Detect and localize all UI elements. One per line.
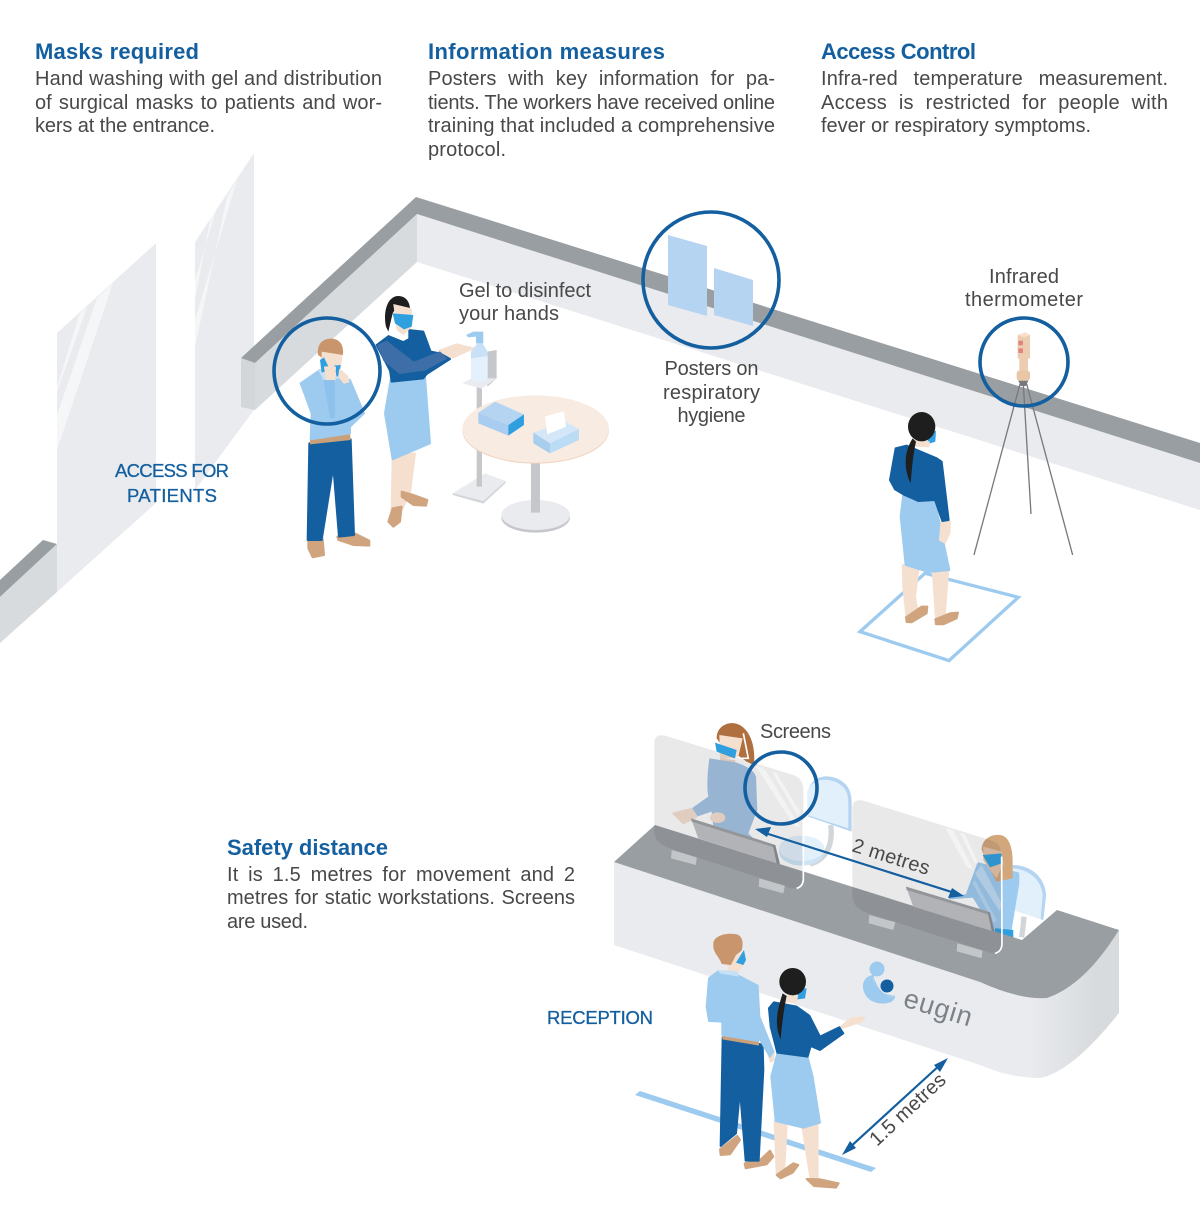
text block: information measures: Posters with key information for pa- xyxy=(428,68,775,90)
posters xyxy=(668,235,753,326)
label: access for patients: PATIENTS xyxy=(127,485,217,506)
text block: masks required: of surgical masks to patients and wor- xyxy=(35,92,382,114)
magnifier circle: thermometer xyxy=(980,318,1068,406)
text block: masks required: Hand washing with gel and distribution xyxy=(35,68,382,90)
chair left xyxy=(779,776,852,866)
text block: safety distance: are used. xyxy=(227,911,308,933)
thermometer on tripod xyxy=(974,332,1073,555)
text block: safety distance xyxy=(227,864,575,933)
text block: information measures: tients. The workers have received online xyxy=(428,92,775,114)
floor marking square xyxy=(860,573,1018,661)
text block: access control xyxy=(821,68,1168,137)
text block: masks required: kers at the entrance. xyxy=(35,115,215,137)
round table with boxes xyxy=(462,395,609,533)
label: posters on respiratory hygiene xyxy=(663,358,760,427)
logo: eugin xyxy=(864,962,976,1032)
heading: safety distance: Safety distance xyxy=(227,835,388,860)
heading: access control: Access Control xyxy=(821,39,976,64)
text block: information measures: protocol. xyxy=(428,139,506,161)
label: infrared thermometer: Infrared xyxy=(989,266,1059,288)
label: 2 metres: 2 metres xyxy=(849,835,932,880)
text block: access control: fever or respiratory symptoms. xyxy=(821,115,1091,137)
text block: information measures xyxy=(428,68,775,161)
woman in queue xyxy=(769,968,864,1188)
entrance glass door right xyxy=(195,153,254,490)
magnifier circle: mask xyxy=(274,318,380,424)
label: infrared thermometer xyxy=(965,266,1083,311)
label: gel to disinfect: Gel to disinfect xyxy=(459,280,591,302)
label: posters on respiratory hygiene: Posters on xyxy=(664,358,758,380)
chair right xyxy=(1013,865,1046,937)
arrow: 2 metres xyxy=(755,827,964,898)
text block: masks required xyxy=(35,68,382,137)
text block: access control: Infra-red temperature measurement. xyxy=(821,68,1168,90)
worker right xyxy=(950,835,1018,940)
text block: access control: Access is restricted for people with xyxy=(821,92,1168,114)
monitors and screen clips xyxy=(671,818,995,958)
chairs and reception staff behind desk xyxy=(673,723,1046,940)
label: access for patients: ACCESS FOR xyxy=(115,460,229,481)
magnifier circle: posters xyxy=(643,212,779,348)
floor line and distance arrow xyxy=(635,1058,948,1172)
protective screen left xyxy=(654,735,803,889)
label: posters on respiratory hygiene: hygiene xyxy=(678,405,746,427)
entrance glass door left xyxy=(57,243,156,592)
label: access for patients xyxy=(115,460,229,506)
man putting on mask xyxy=(301,339,369,557)
label: gel to disinfect: your hands xyxy=(459,303,559,325)
logo: eugin: eugin xyxy=(900,983,976,1032)
text block: safety distance: It is 1.5 metres for movement and 2 xyxy=(227,864,575,886)
label: reception: RECEPTION xyxy=(547,1007,653,1028)
back wall xyxy=(241,197,1200,510)
heading: masks required: Masks required xyxy=(35,39,199,64)
label: posters on respiratory hygiene: respiratory xyxy=(663,382,760,404)
label: screens: Screens xyxy=(760,721,831,743)
reception desk xyxy=(614,825,1119,1078)
text block: safety distance: metres for static workstations. Screens xyxy=(227,887,575,909)
protective screen right xyxy=(852,800,1002,953)
label: gel to disinfect xyxy=(459,280,591,325)
gel dispenser on stand xyxy=(453,332,506,504)
left entrance wall end xyxy=(0,540,57,643)
man in queue xyxy=(707,934,774,1168)
woman with dark sweater using gel xyxy=(377,296,473,527)
woman standing on marking xyxy=(890,412,958,624)
label: infrared thermometer: thermometer xyxy=(965,289,1083,311)
text block: information measures: training that included a comprehensive xyxy=(428,115,775,137)
label: 1.5 metres: 1.5 metres xyxy=(865,1069,951,1151)
worker left xyxy=(673,723,757,838)
magnifier circle: screens xyxy=(745,752,817,824)
heading: information measures: Information measures xyxy=(428,39,665,64)
